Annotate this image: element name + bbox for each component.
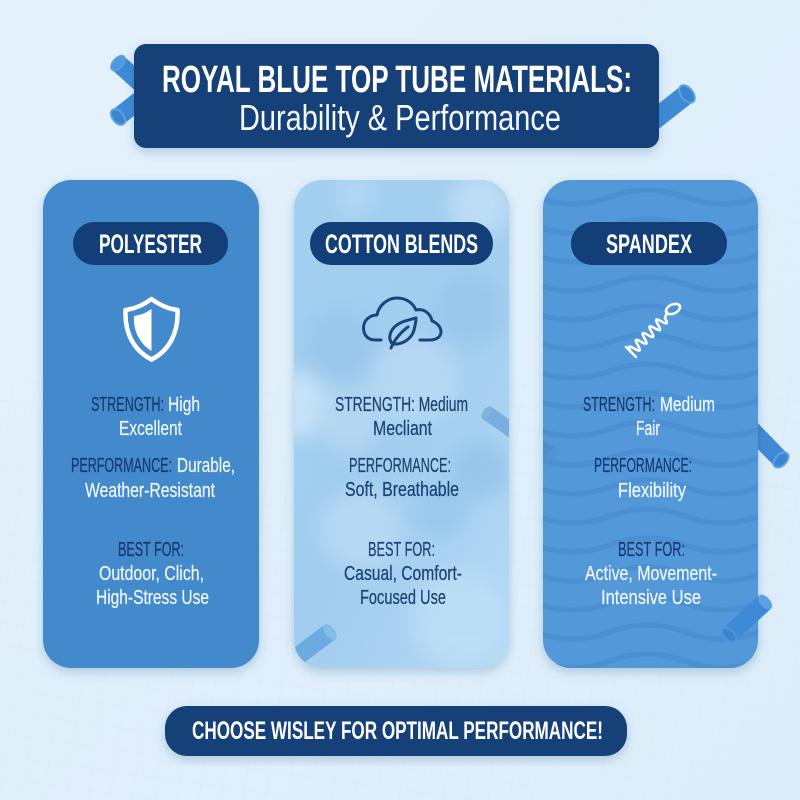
cotton strength <box>335 393 468 440</box>
cotton heading: COTTON BLENDS <box>325 229 478 259</box>
polyester performance <box>71 454 235 502</box>
spandex best for: BEST FOR: <box>618 538 685 561</box>
polyester strength: High <box>168 393 200 416</box>
tube overlapping spandex panel <box>719 592 775 645</box>
spandex performance <box>594 454 692 502</box>
cotton best for: Casual, Comfort- <box>344 562 462 585</box>
cotton best for: Focused Use <box>360 586 446 609</box>
polyester heading: POLYESTER <box>99 229 202 259</box>
spandex heading <box>571 222 727 265</box>
spandex strength <box>583 393 715 440</box>
cotton best for <box>344 538 462 609</box>
tubes behind title <box>108 53 698 127</box>
panel: polyester <box>43 180 259 668</box>
cotton heading <box>310 222 493 265</box>
cotton strength: Mecliant <box>373 417 432 440</box>
polyester strength: STRENGTH: <box>91 393 164 416</box>
panel: spandex <box>538 179 772 677</box>
polyester best for <box>96 538 209 609</box>
polyester performance: Durable, <box>177 454 235 477</box>
cotton performance: Soft, Breathable <box>345 478 459 501</box>
polyester performance: Weather-Resistant <box>85 479 215 502</box>
call to action: CHOOSE WISLEY FOR OPTIMAL PERFORMANCE! <box>192 717 603 745</box>
spandex best for: Active, Movement- <box>585 562 717 585</box>
spandex best for <box>585 538 717 609</box>
spandex strength: Medium <box>660 393 715 416</box>
spandex best for: Intensive Use <box>601 586 701 609</box>
icon: cloud and leaf <box>364 298 441 348</box>
spandex performance: PERFORMANCE: <box>594 454 692 477</box>
spandex strength: Fair <box>636 417 660 440</box>
polyester strength <box>91 393 200 440</box>
wave texture <box>543 188 758 668</box>
polyester heading <box>73 222 228 265</box>
tube: behind spandex right <box>750 428 791 470</box>
spandex heading: SPANDEX <box>606 229 692 259</box>
cotton strength: STRENGTH: Medium <box>335 393 468 416</box>
bokeh texture <box>294 180 509 664</box>
spandex strength: STRENGTH: <box>583 393 655 416</box>
polyester best for: High-Stress Use <box>96 586 209 609</box>
cotton performance <box>345 454 459 501</box>
polyester best for: BEST FOR: <box>118 538 184 561</box>
tube inside spandex panel <box>543 440 556 458</box>
call to action <box>165 706 627 756</box>
title line 2: Durability & Performance <box>239 97 561 138</box>
panel: cotton blends <box>289 179 514 677</box>
polyester strength: Excellent <box>119 417 182 440</box>
icon: shield <box>125 299 178 360</box>
cotton performance: PERFORMANCE: <box>349 454 451 477</box>
tube inside cotton panel <box>481 406 509 438</box>
tube lower cotton panel <box>295 624 337 662</box>
polyester performance: PERFORMANCE: <box>71 454 172 477</box>
cotton best for: BEST FOR: <box>368 538 435 561</box>
spandex performance: Flexibility <box>618 479 687 502</box>
polyester best for: Outdoor, Clich, <box>99 562 204 585</box>
icon: spring <box>626 302 682 357</box>
title banner <box>134 44 659 148</box>
